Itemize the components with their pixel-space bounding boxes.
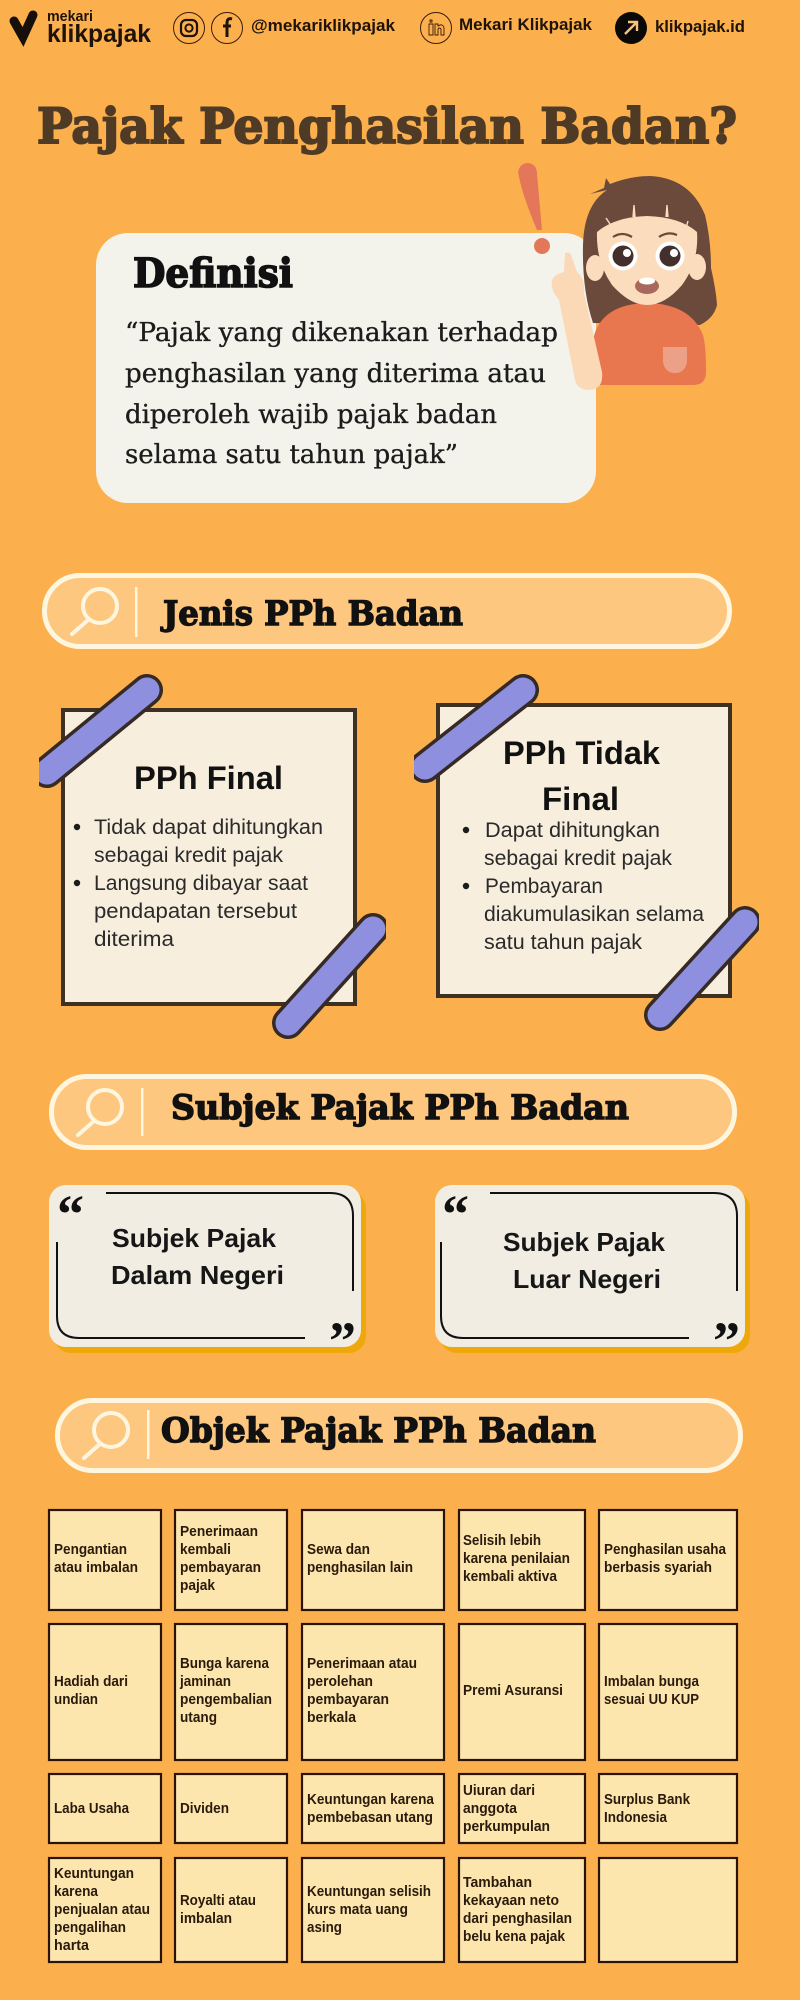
panel: pph tidak final (425, 690, 745, 1015)
quote marks: “ (57, 1184, 84, 1244)
cell: penerimaan kembali: pembayaran (180, 1559, 261, 1576)
cell: uiuran (459, 1774, 585, 1843)
cell: keuntungan penjualan: Keuntungan (54, 1865, 134, 1882)
cell: penerimaan berkala (302, 1624, 444, 1760)
cell: penghasilan syariah: Penghasilan usaha (604, 1541, 727, 1558)
cell: keuntungan pembebasan: Keuntungan karena (307, 1791, 435, 1808)
bullet list: diterima (94, 928, 174, 951)
heading: definisi: Definisi (133, 250, 293, 297)
card heading: PPh Tidak (503, 735, 660, 771)
heading text: Objek Pajak PPh Badan (161, 1411, 596, 1451)
cell: uiuran: Uiuran dari (463, 1782, 535, 1799)
cell: penerimaan kembali: Penerimaan (180, 1523, 258, 1540)
icon: instagram (174, 12, 204, 44)
logo: klikpajak: mekari (47, 9, 93, 25)
cell: pengantian: Pengantian (54, 1541, 127, 1558)
cell: keuntungan pembebasan (302, 1774, 444, 1843)
cell: bunga (175, 1624, 287, 1760)
bullet list: Langsung dibayar saat (94, 872, 308, 895)
bullet list: Pembayaran (485, 875, 603, 898)
bullet list (74, 816, 323, 951)
definition quote (125, 318, 558, 470)
card text: Dalam Negeri (111, 1260, 284, 1290)
logo: klikpajak: klikpajak (47, 20, 151, 48)
cell: laba usaha (49, 1774, 161, 1843)
cell: empty (599, 1858, 737, 1962)
cell: hadiah: undian (54, 1691, 98, 1708)
cell: pengantian (49, 1510, 161, 1610)
handle: linkedin: Mekari Klikpajak (459, 15, 593, 34)
cell: bunga: utang (180, 1709, 217, 1726)
card text: Luar Negeri (513, 1264, 661, 1294)
cell: uiuran: perkumpulan (463, 1818, 550, 1835)
definition quote: diperoleh wajib pajak badan (125, 400, 497, 430)
tape: bottom right (288, 929, 373, 1023)
cell: penghasilan syariah (599, 1510, 737, 1610)
cell: keuntungan penjualan: penjualan atau (54, 1901, 150, 1918)
cell: bunga: pengembalian (180, 1691, 272, 1708)
cell: bunga: jaminan (179, 1673, 231, 1690)
icon: magnifier (72, 589, 117, 634)
panel: definisi (96, 233, 596, 503)
icon: website arrow (615, 12, 647, 44)
panel: subjek pajak luar negeri (435, 1184, 750, 1371)
bullet list: Tidak dapat dihitungkan (94, 816, 323, 839)
bullet list: diakumulasikan selama (484, 903, 704, 926)
cell: penerimaan berkala: pembayaran (307, 1691, 389, 1708)
cell: royalti: imbalan (180, 1910, 232, 1927)
logo: klikpajak (14, 9, 151, 48)
cell: selisih lebih: kembali aktiva (463, 1568, 558, 1585)
cell: laba usaha: Laba Usaha (54, 1800, 130, 1817)
cell: penerimaan berkala: perolehan (307, 1673, 373, 1690)
bangs slits (606, 205, 688, 228)
eyebrows (613, 233, 677, 237)
card text (111, 1223, 284, 1290)
face (597, 216, 697, 305)
arm and pointing hand (552, 253, 602, 390)
cell: royalti: Royalti atau (180, 1892, 256, 1909)
shirt (593, 303, 706, 385)
definition quote: selama satu tahun pajak” (125, 440, 458, 470)
cell: sewa: penghasilan lain (307, 1559, 413, 1576)
bullet list: Dapat dihitungkan (485, 819, 660, 842)
cell: penerimaan kembali: kembali (180, 1541, 231, 1558)
cell: penghasilan syariah: berbasis syariah (604, 1559, 712, 1576)
cell: keuntungan penjualan: karena (54, 1883, 99, 1900)
cell: tambahan kekayaan (459, 1858, 585, 1962)
cell: surplus: Indonesia (604, 1809, 668, 1826)
bullet list: pendapatan tersebut (94, 900, 297, 923)
panel: subjek pajak dalam negeri (49, 1184, 366, 1371)
cell: surplus (599, 1774, 737, 1843)
hair (583, 176, 717, 325)
cell: penerimaan kembali: pajak (180, 1577, 216, 1594)
icon: facebook (212, 12, 242, 44)
quote marks: “ (442, 1184, 469, 1244)
cell: hadiah: Hadiah dari (54, 1673, 128, 1690)
bullet list (463, 819, 704, 954)
cell: tambahan kekayaan: kekayaan neto (463, 1892, 559, 1909)
cell: penerimaan kembali (175, 1510, 287, 1610)
cell: imbalan bunga (599, 1624, 737, 1760)
cell: selisih lebih: karena penilaian (463, 1550, 570, 1567)
cell: keuntungan kurs (302, 1858, 444, 1962)
grid: objek pajak (49, 1510, 737, 1962)
definition quote: penghasilan yang diterima atau (125, 359, 546, 389)
cell: keuntungan kurs: kurs mata uang (307, 1901, 408, 1918)
icon: linkedin (420, 12, 452, 44)
icon: magnifier (78, 1090, 122, 1135)
cell: tambahan kekayaan: Tambahan (463, 1874, 532, 1891)
cell: hadiah (49, 1624, 161, 1760)
heading text: Jenis PPh Badan (160, 594, 463, 634)
tape: top left (47, 690, 147, 772)
cell: keuntungan penjualan: harta (54, 1937, 90, 1954)
definition quote: “Pajak yang dikenakan terhadap (125, 318, 558, 348)
header bar (14, 9, 745, 48)
bullet list: sebagai kredit pajak (484, 847, 672, 870)
website url: klikpajak.id (655, 17, 745, 36)
cell: keuntungan kurs: asing (307, 1919, 342, 1936)
bullet list: sebagai kredit pajak (94, 844, 283, 867)
cell: keuntungan pembebasan: pembebasan utang (307, 1809, 433, 1826)
quote marks: ” (713, 1311, 740, 1371)
cell: keuntungan kurs: Keuntungan selisih (307, 1883, 431, 1900)
quote marks (442, 1184, 740, 1371)
shirt pocket (663, 347, 687, 373)
cell: imbalan bunga: sesuai UU KUP (604, 1691, 699, 1708)
ears (586, 255, 604, 281)
cell: keuntungan penjualan: pengalihan (54, 1919, 126, 1936)
cell: uiuran: anggota (463, 1800, 518, 1817)
quote marks: ” (329, 1311, 356, 1371)
cell: premi asuransi: Premi Asuransi (463, 1682, 563, 1699)
tape: top left (425, 690, 523, 767)
card text: Subjek Pajak (503, 1227, 666, 1257)
cell: dividen (175, 1774, 287, 1843)
cell: keuntungan penjualan (49, 1858, 161, 1962)
cell: dividen: Dividen (180, 1800, 229, 1817)
cell: sewa (302, 1510, 444, 1610)
card text: Subjek Pajak (112, 1223, 277, 1253)
icon: magnifier (84, 1413, 128, 1458)
panel: pph final (47, 690, 373, 1023)
illustration: girl pointing (552, 176, 717, 390)
card heading (503, 735, 660, 817)
cell: surplus: Surplus Bank (604, 1791, 691, 1808)
cell: premi asuransi (459, 1624, 585, 1760)
section heading: jenis pph badan (44, 576, 730, 646)
handle: instagram and facebook: @mekariklikpajak (251, 16, 396, 35)
title: Pajak Penghasilan Badan? (37, 97, 737, 155)
tape: bottom right (660, 922, 745, 1015)
card text (503, 1227, 666, 1294)
cell: tambahan kekayaan: dari penghasilan (463, 1910, 572, 1927)
cell: penerimaan berkala: Penerimaan atau (307, 1655, 417, 1672)
section heading: subjek pajak pph badan (52, 1076, 734, 1148)
cell: imbalan bunga: Imbalan bunga (604, 1673, 700, 1690)
cell: bunga: Bunga karena (180, 1655, 270, 1672)
cell: sewa: Sewa dan (307, 1541, 370, 1558)
cell: penerimaan berkala: berkala (307, 1709, 357, 1726)
cell: pengantian: atau imbalan (54, 1559, 138, 1576)
cell: selisih lebih (459, 1510, 585, 1610)
cell: royalti (175, 1858, 287, 1962)
cell: selisih lebih: Selisih lebih (463, 1532, 541, 1549)
card heading: Final (542, 781, 619, 817)
bullet list: satu tahun pajak (484, 931, 643, 954)
heading text: Subjek Pajak PPh Badan (171, 1088, 629, 1128)
cell: tambahan kekayaan: belu kena pajak (463, 1928, 566, 1945)
icon: exclamation mark (518, 163, 550, 254)
card heading: PPh Final (134, 760, 283, 796)
section heading: objek pajak pph badan (58, 1400, 740, 1470)
mouth (635, 278, 659, 294)
eyes (608, 242, 684, 270)
quote marks (57, 1184, 356, 1371)
